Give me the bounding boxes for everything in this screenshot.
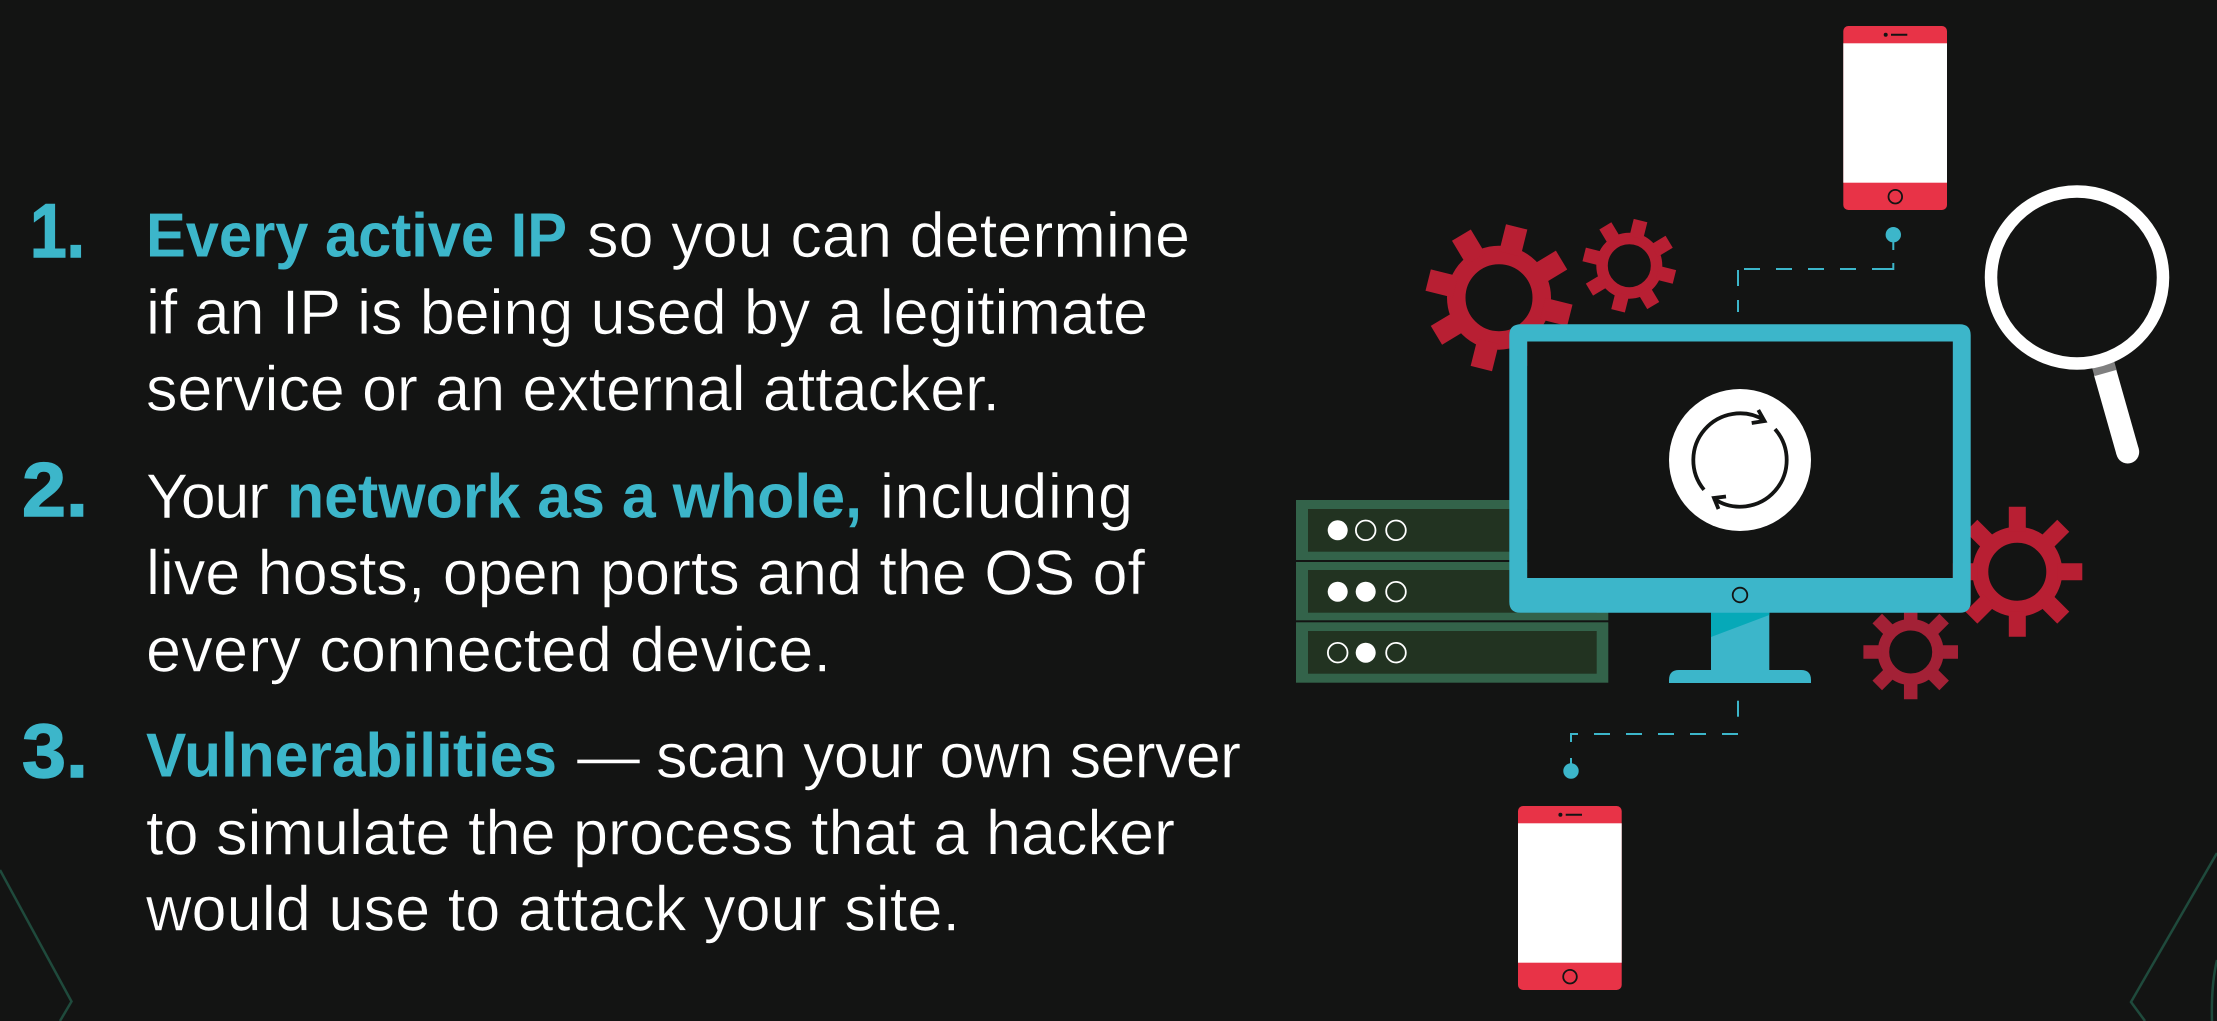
icon: small gear top bbox=[1584, 221, 1674, 311]
icon: large gear right bbox=[1952, 507, 2082, 637]
server unit 3 bbox=[1296, 622, 1608, 683]
item 2 text: including bbox=[880, 462, 1133, 532]
list item 1 bbox=[30, 189, 1190, 424]
item 2 text: every connected device. bbox=[146, 616, 831, 686]
item 2 text bbox=[146, 462, 1145, 686]
item 1 text bbox=[146, 201, 1190, 424]
item 3 text: Vulnerabilities bbox=[146, 722, 557, 790]
list item 3 bbox=[22, 709, 1241, 944]
connector: top phone to monitor bbox=[1738, 227, 1901, 312]
icon: refresh badge bbox=[1669, 389, 1811, 531]
number 3: 3. bbox=[22, 709, 88, 794]
monitor frame bbox=[1509, 324, 1971, 613]
number 1: 1. bbox=[30, 189, 85, 274]
icon: small gear bottom right bbox=[1863, 605, 1958, 699]
item 1 text: so you can determine bbox=[587, 201, 1190, 271]
monitor stand bbox=[1669, 605, 1811, 683]
icon: bottom phone bbox=[1518, 806, 1622, 990]
item 3 text bbox=[145, 722, 1241, 944]
item 2 text: live hosts, open ports and the OS of bbox=[146, 538, 1145, 608]
item 2 text: Your bbox=[146, 462, 269, 532]
monitor power button bbox=[1733, 588, 1747, 602]
server unit 2 bbox=[1296, 562, 1608, 620]
item 3 text: would use to attack your site. bbox=[145, 874, 960, 944]
list item 2 bbox=[22, 448, 1145, 686]
icon: large gear top left bbox=[1428, 227, 1570, 369]
icon: server rack bbox=[1296, 500, 1608, 683]
icon: magnifying glass bbox=[1991, 192, 2163, 464]
item 1 text: if an IP is being used by a legitimate bbox=[146, 278, 1148, 348]
item 1 text: Every active IP bbox=[146, 202, 567, 270]
item 2 text: network as a whole, bbox=[287, 462, 862, 532]
icon: top phone bbox=[1843, 26, 1947, 210]
server unit 1 bbox=[1296, 500, 1608, 560]
connector: monitor to bottom phone bbox=[1563, 701, 1738, 779]
number 2: 2. bbox=[22, 448, 88, 533]
item 1 text: service or an external attacker. bbox=[146, 354, 1000, 424]
item 3 text: — scan your own server bbox=[577, 722, 1241, 792]
item 3 text: to simulate the process that a hacker bbox=[146, 798, 1175, 868]
icon: desktop monitor bbox=[1509, 324, 1971, 683]
